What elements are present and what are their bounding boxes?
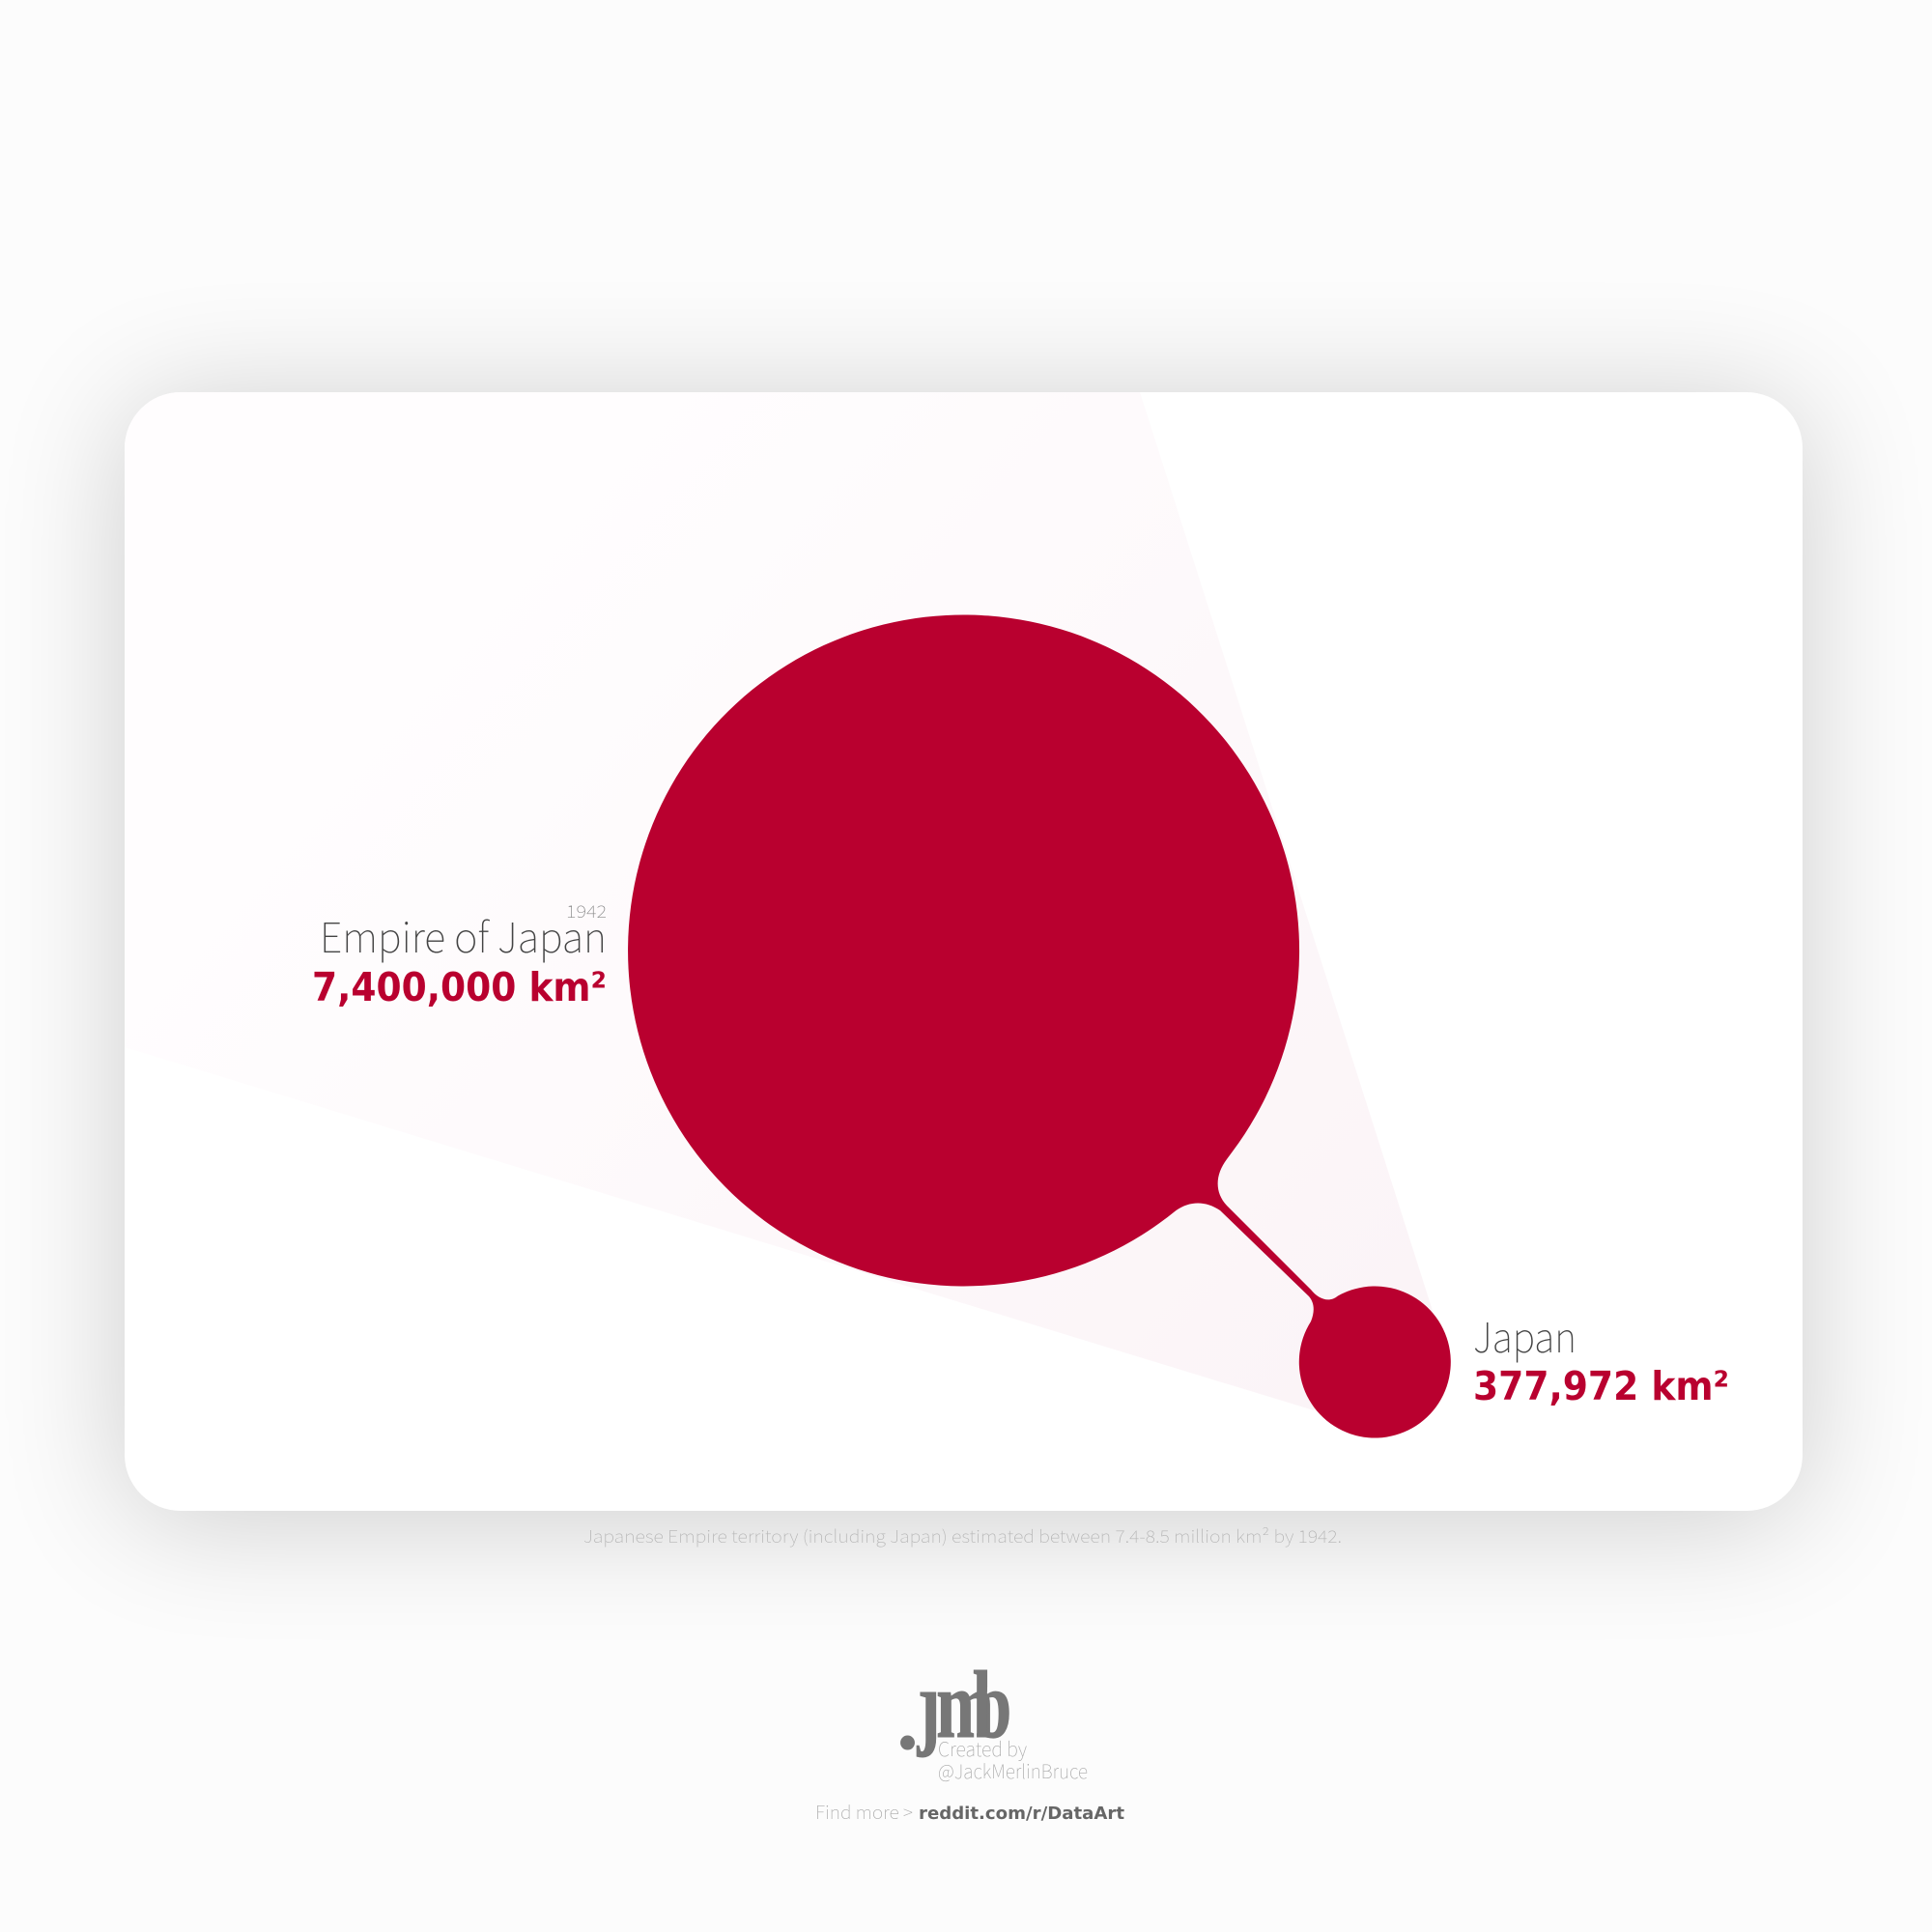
handle: @JackMerlinBruce	[938, 1756, 1088, 1784]
infographic artwork	[315, 614, 1727, 1821]
circles: Empire of Japan and Japan joined by a connector	[628, 614, 1451, 1438]
label: Empire of Japan	[312, 898, 607, 1010]
logo: jmb: .	[896, 1669, 919, 1768]
credit	[938, 1734, 1088, 1784]
year: 1942	[566, 898, 607, 923]
footnote: Japanese Empire territory (including Japan) estimated between 7.4-8.5 million km² by 1942.	[583, 1523, 1342, 1548]
reddit url: reddit.com/r/DataArt	[919, 1804, 1124, 1824]
find more: Find more >	[815, 1799, 913, 1825]
panel: white card	[125, 392, 1803, 1511]
area value: 7,400,000 km²	[312, 964, 607, 1010]
label: Japan	[1473, 1305, 1729, 1409]
source link	[815, 1799, 1124, 1825]
area value: 377,972 km²	[1473, 1363, 1729, 1409]
name: Japan	[1473, 1305, 1577, 1365]
name: Empire of Japan	[320, 905, 607, 965]
logo: jmb: ȷmb	[917, 1650, 1011, 1758]
created by: Created by	[938, 1734, 1028, 1762]
scale projection beam	[921, 863, 1434, 1410]
